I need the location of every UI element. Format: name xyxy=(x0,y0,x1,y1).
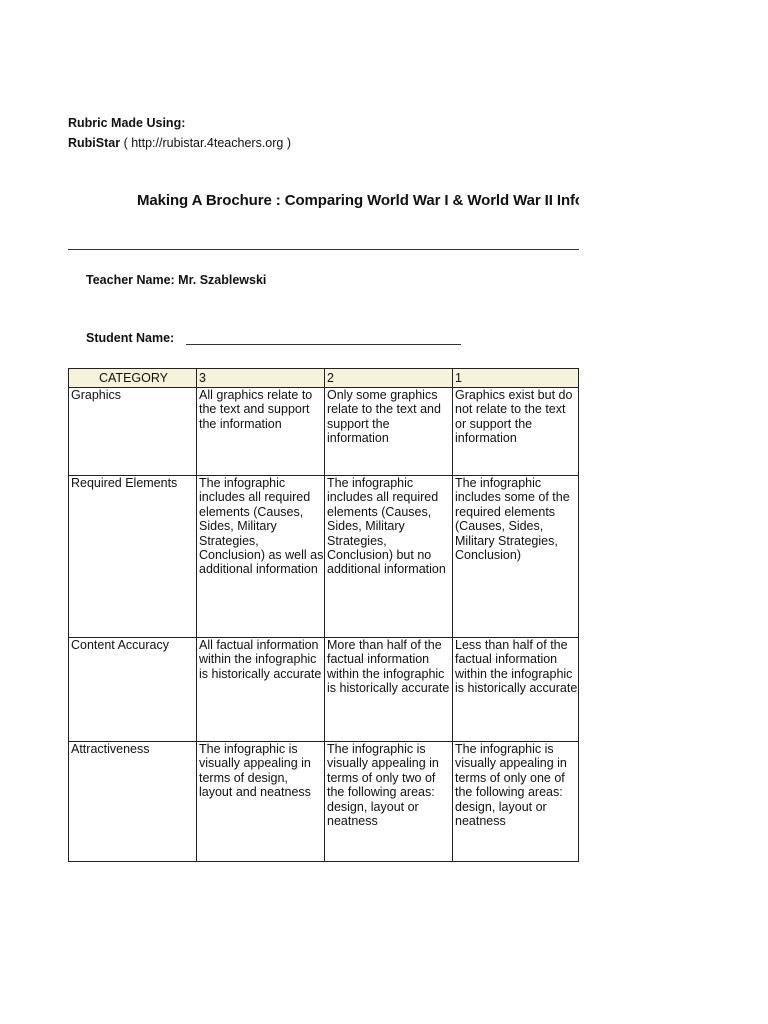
rubric table: is historically accurate xyxy=(199,667,321,681)
rubric table: The infographic is xyxy=(199,742,298,756)
rubric table: elements (Causes, xyxy=(327,505,431,519)
rubric table: Conclusion) xyxy=(455,548,521,562)
rubric table: Sides, Military xyxy=(327,519,405,533)
rubric table: factual information xyxy=(455,652,557,666)
teacher name: Teacher Name: Mr. Szablewski xyxy=(86,273,266,287)
rubric table: (Causes, Sides, xyxy=(455,519,543,533)
rubric table: required elements xyxy=(455,505,555,519)
rubric table: design, layout or xyxy=(455,800,547,814)
header: rubric made using: Rubric Made Using: xyxy=(68,116,185,130)
rubric table: Conclusion) as well as xyxy=(199,548,323,562)
rubric table: is historically accurate xyxy=(327,681,449,695)
rubric table xyxy=(68,368,579,862)
rubric table: elements (Causes, xyxy=(199,505,303,519)
rubric table: the text and support xyxy=(199,402,310,416)
rubric table: visually appealing in xyxy=(199,756,311,770)
rubric table: More than half of the xyxy=(327,638,442,652)
rubric table: the information xyxy=(199,417,282,431)
rubric table: Less than half of the xyxy=(455,638,568,652)
rubric table: Strategies, xyxy=(327,534,387,548)
row: required elements: Required Elements xyxy=(71,476,177,490)
rubric table: not relate to the text xyxy=(455,402,566,416)
header row xyxy=(69,369,578,388)
row: graphics: Graphics xyxy=(71,388,121,402)
rubric table: terms of only two of xyxy=(327,771,435,785)
rubric table: The infographic xyxy=(199,476,285,490)
rubric table: includes all required xyxy=(199,490,310,504)
rubric table: design, layout or xyxy=(327,800,419,814)
rubric table: terms of only one of xyxy=(455,771,565,785)
rubric table: information xyxy=(327,431,389,445)
rubric table: Conclusion) but no xyxy=(327,548,431,562)
rubric table: The infographic is xyxy=(455,742,554,756)
rubric table: All factual information xyxy=(199,638,319,652)
rubric table: neatness xyxy=(327,814,378,828)
rubric table: information xyxy=(455,431,517,445)
rubric table: within the infographic xyxy=(327,667,444,681)
rubric table: within the infographic xyxy=(199,652,316,666)
rubric table: Military Strategies, xyxy=(455,534,558,548)
row: attractiveness: Attractiveness xyxy=(71,742,150,756)
rubric table: Sides, Military xyxy=(199,519,277,533)
rubric table: the following areas: xyxy=(327,785,435,799)
rubric table: is historically accurate xyxy=(455,681,577,695)
rubric table: terms of design, xyxy=(199,771,288,785)
rubric table: The infographic xyxy=(455,476,541,490)
rubric table: 1 xyxy=(455,371,462,385)
rubric table: visually appealing in xyxy=(327,756,439,770)
rubric table: Only some graphics xyxy=(327,388,437,402)
rubric table: 3 xyxy=(199,371,206,385)
rubric table: within the infographic xyxy=(455,667,572,681)
rubric table: Graphics exist but do xyxy=(455,388,572,402)
divider line xyxy=(68,249,579,250)
header: rubric made using: RubiStar ( http://rubistar.4teachers.org ) xyxy=(68,136,291,150)
rubric table: support the xyxy=(327,417,390,431)
rubric table: layout and neatness xyxy=(199,785,311,799)
rubric table: Strategies, xyxy=(199,534,259,548)
rubric table: neatness xyxy=(455,814,506,828)
header: rubric made using xyxy=(68,116,291,150)
rubric table: All graphics relate to xyxy=(199,388,312,402)
rubric table: visually appealing in xyxy=(455,756,567,770)
rubric table: CATEGORY xyxy=(99,371,168,385)
rubric table: the following areas: xyxy=(455,785,563,799)
rubric table: relate to the text and xyxy=(327,402,441,416)
rubric table: additional information xyxy=(327,562,446,576)
rubric table: The infographic is xyxy=(327,742,426,756)
student name: Student Name: xyxy=(86,331,174,345)
rubric table: The infographic xyxy=(327,476,413,490)
rubric table: includes all required xyxy=(327,490,438,504)
rubric table: additional information xyxy=(199,562,318,576)
rubric table: or support the xyxy=(455,417,532,431)
rubric table: 2 xyxy=(327,371,334,385)
rubric table: factual information xyxy=(327,652,429,666)
rubric table: includes some of the xyxy=(455,490,570,504)
row: content accuracy: Content Accuracy xyxy=(71,638,169,652)
